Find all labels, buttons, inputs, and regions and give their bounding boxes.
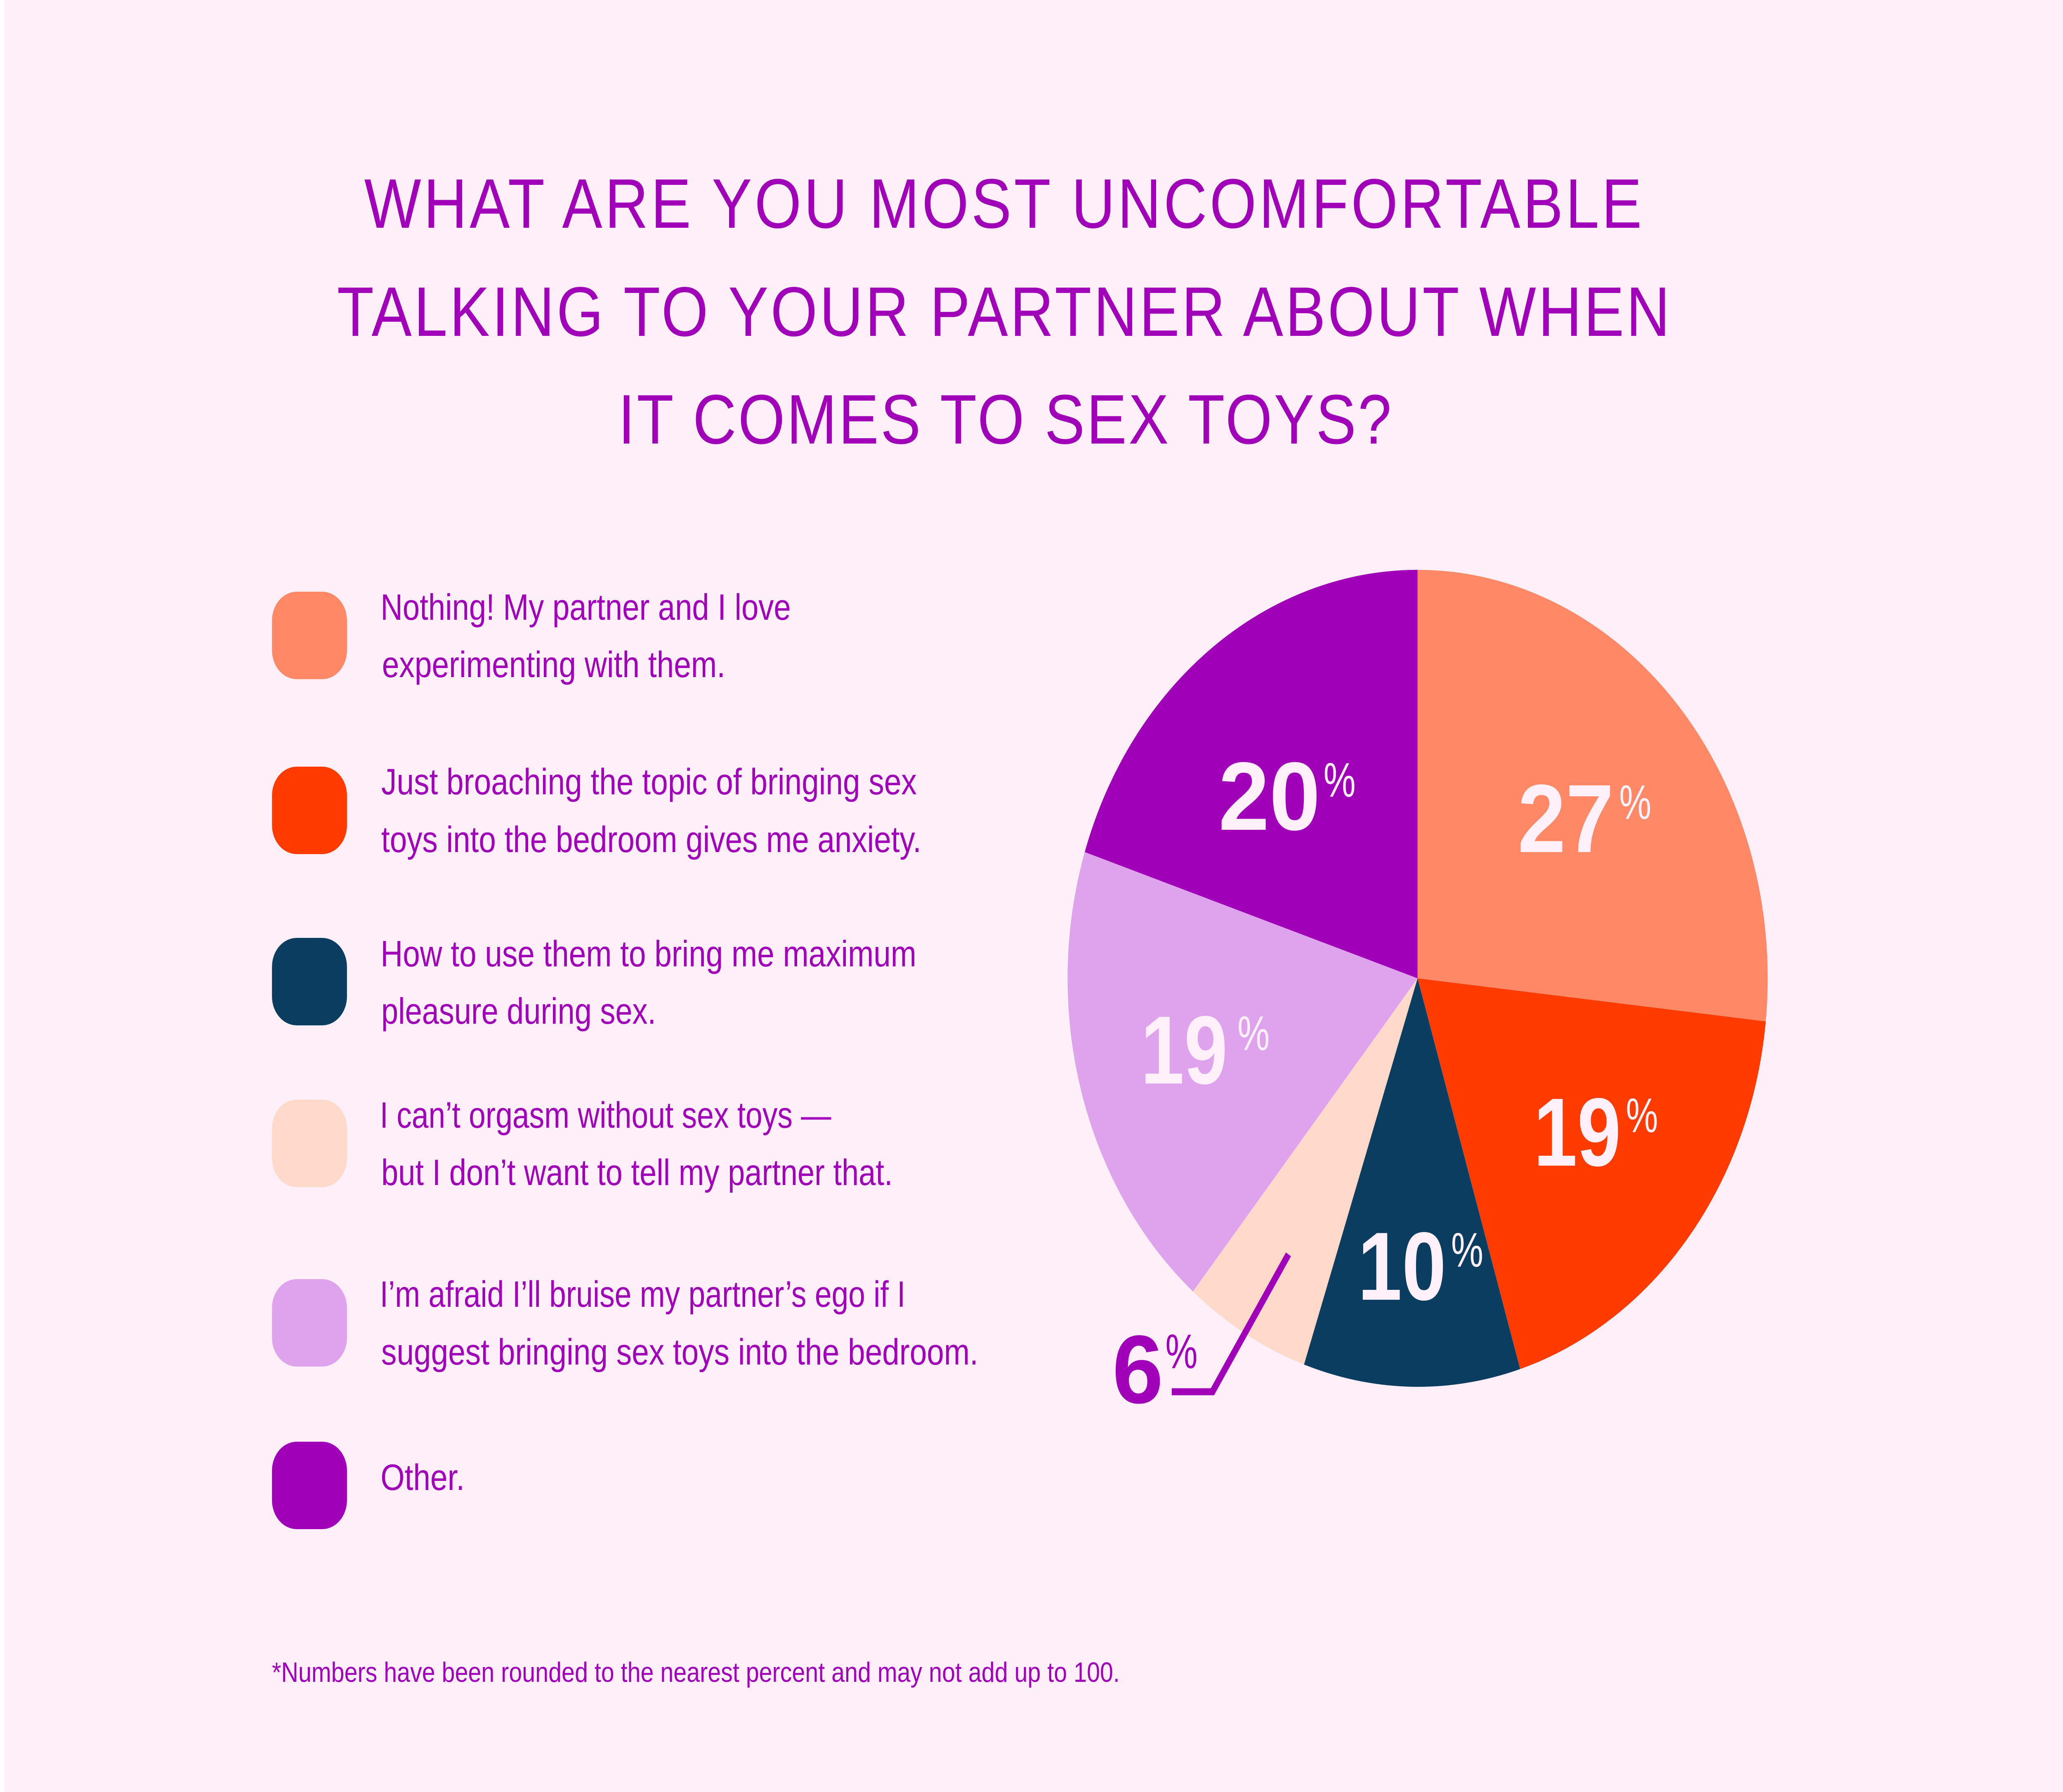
- legend item: how to use them: pleasure during sex.: [381, 990, 656, 1032]
- slice: 27% nothing: [1418, 570, 1768, 1022]
- slice: 10% how to use: [1304, 978, 1520, 1387]
- title: WHAT ARE YOU MOST UNCOMFORTABLE: [364, 164, 1642, 243]
- legend item: bruise partner's ego: I’m afraid I’ll bruise my partner’s ego if I: [380, 1273, 905, 1315]
- legend item: nothing: [272, 586, 791, 685]
- value label: 27%: %: [1619, 776, 1651, 830]
- title: IT COMES TO SEX TOYS?: [618, 380, 1391, 459]
- value label: 27%: [1518, 765, 1651, 873]
- slice: 19% broaching: [1418, 978, 1766, 1369]
- legend item: bruise partner's ego: suggest bringing sex toys into the bedroom.: [381, 1331, 978, 1372]
- value label: 19% lavender: %: [1237, 1007, 1270, 1061]
- legend item: how to use them: [272, 933, 916, 1032]
- value label: 6% with leader line: [1112, 1254, 1289, 1424]
- legend: [272, 586, 978, 1529]
- title: TALKING TO YOUR PARTNER ABOUT WHEN: [337, 272, 1670, 351]
- value label: 6% with leader line: 6: [1112, 1315, 1163, 1424]
- footnote: *Numbers have been rounded to the nearest percent and may not add up to 100.: [272, 1657, 1120, 1688]
- legend item: broaching the topic: [272, 761, 921, 860]
- legend item: nothing: Nothing! My partner and I love: [380, 586, 791, 628]
- slice: 6% can't orgasm: [1193, 978, 1418, 1365]
- legend item: broaching the topic: Just broaching the topic of bringing sex: [381, 761, 917, 802]
- legend item: can't orgasm without toys: [272, 1094, 893, 1193]
- legend item: can't orgasm without toys: but I don’t want to tell my partner that.: [381, 1152, 893, 1193]
- value label: 20%: 20: [1218, 742, 1320, 850]
- title: [337, 164, 1670, 459]
- slice: 20% other: [1085, 570, 1418, 978]
- value label: 10%: %: [1451, 1223, 1483, 1277]
- pie chart: [1067, 570, 1768, 1387]
- legend item: other: [272, 1442, 465, 1529]
- value label: 20%: [1218, 742, 1356, 850]
- value label: 19% red: %: [1626, 1089, 1658, 1143]
- value label: 19% lavender: 19: [1140, 996, 1227, 1104]
- legend item: can't orgasm without toys: I can’t orgasm without sex toys —: [380, 1094, 831, 1136]
- value label: 19% red: 19: [1534, 1078, 1621, 1186]
- value label: 20%: %: [1324, 753, 1356, 807]
- legend item: broaching the topic: toys into the bedroom gives me anxiety.: [381, 819, 921, 860]
- legend item: bruise partner's ego: [272, 1273, 978, 1372]
- legend item: how to use them: How to use them to bring me maximum: [380, 933, 916, 974]
- value label: 27%: 27: [1518, 765, 1614, 873]
- value label: 10%: 10: [1358, 1212, 1446, 1320]
- legend item: other: Other.: [380, 1457, 465, 1498]
- value label: 6% with leader line: %: [1165, 1325, 1197, 1379]
- legend item: nothing: experimenting with them.: [382, 644, 725, 685]
- slice: 19% bruise ego: [1067, 852, 1418, 1291]
